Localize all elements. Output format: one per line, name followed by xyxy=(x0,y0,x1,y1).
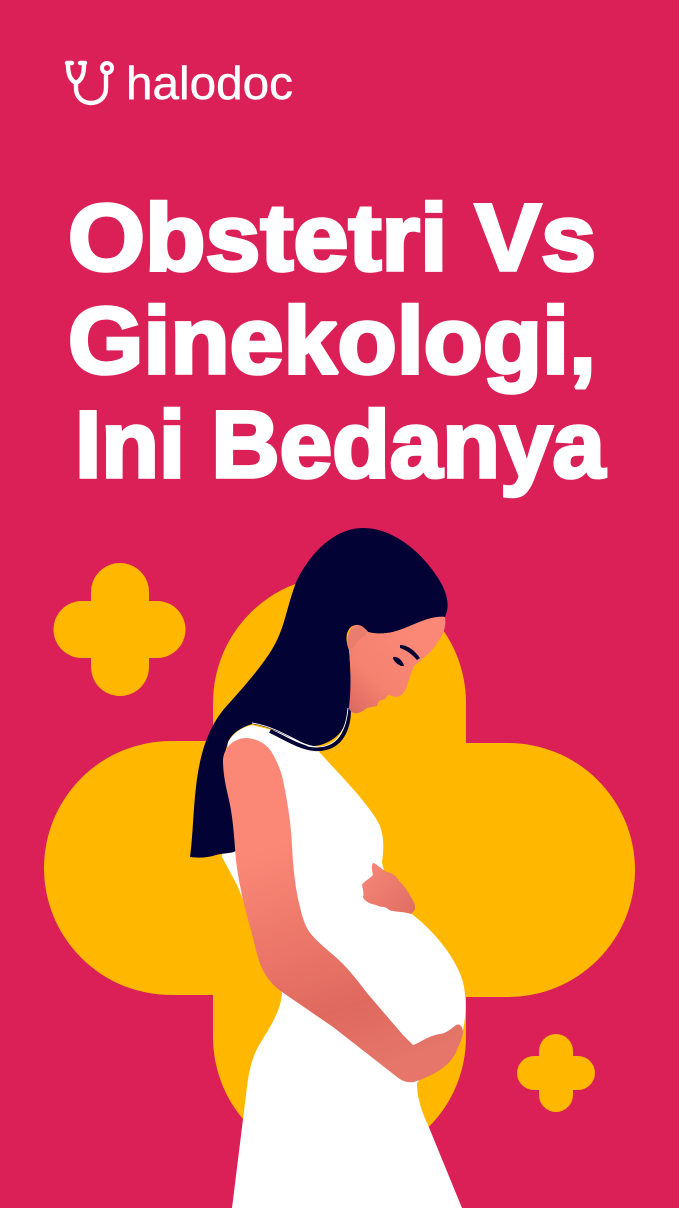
title: Obstetri Vs xyxy=(68,185,596,291)
face and neck xyxy=(348,617,445,713)
necklace strand: light xyxy=(252,708,348,747)
eye xyxy=(393,657,404,666)
ear xyxy=(347,626,367,649)
title: Ginekologi, xyxy=(68,288,596,394)
icon: stethoscope xyxy=(67,63,112,103)
title: Ini Bedanya xyxy=(75,392,606,498)
icon: large plus background xyxy=(44,576,635,1164)
arm xyxy=(223,738,463,1082)
hand on belly xyxy=(362,863,415,914)
title xyxy=(68,185,606,498)
logo: halodoc xyxy=(67,57,293,109)
hair xyxy=(190,528,448,858)
dress xyxy=(222,725,466,1208)
icon: small plus bottom right xyxy=(517,1034,595,1112)
illustration: pregnant woman xyxy=(190,528,466,1208)
icon: small plus top left xyxy=(54,563,186,696)
eyebrow xyxy=(400,645,420,660)
necklace strand: dark xyxy=(270,710,349,749)
wordmark: halodoc xyxy=(126,57,293,109)
